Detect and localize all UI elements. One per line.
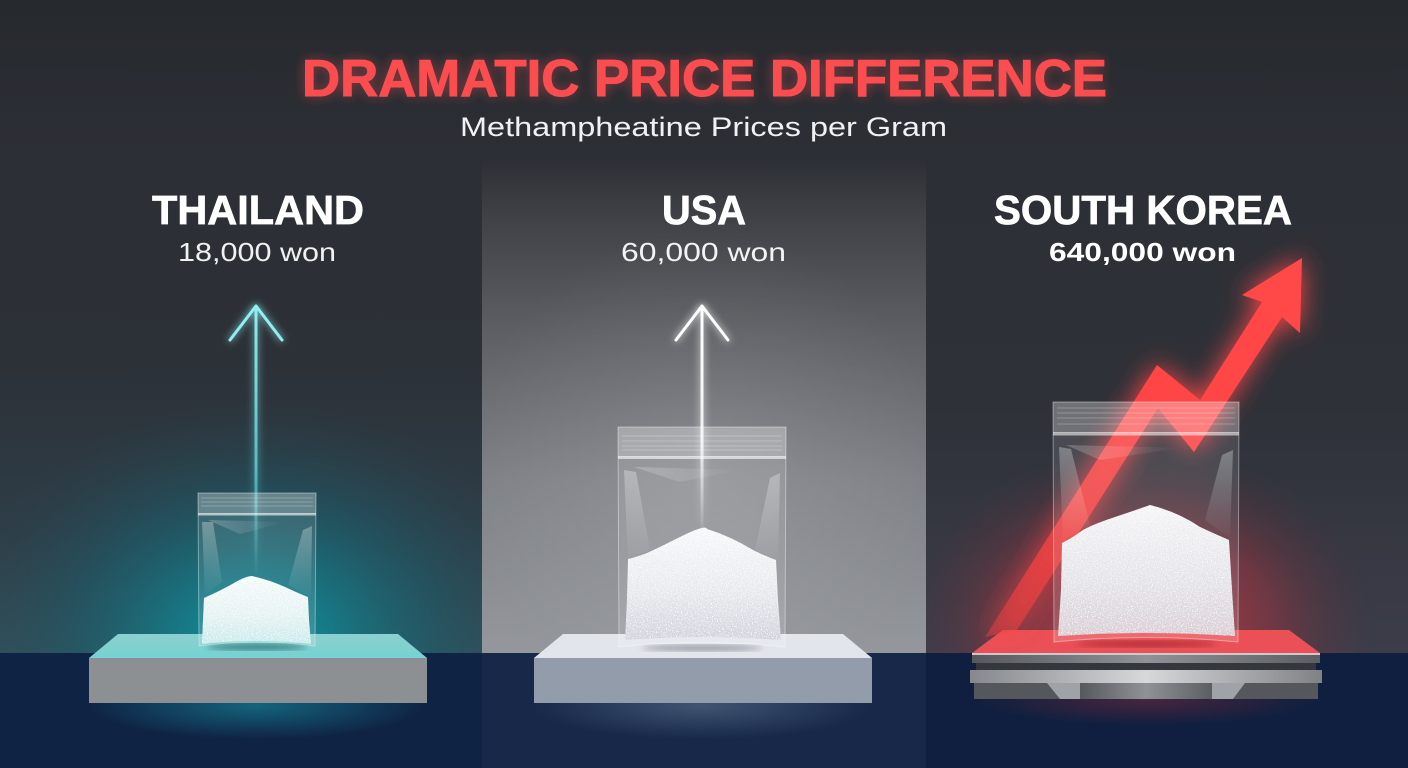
- heading: USA: USA: [662, 187, 746, 233]
- heading: South Korea: SOUTH KOREA: [994, 187, 1292, 233]
- bag: USA: [618, 427, 786, 651]
- icon: teal thin arrow: [230, 306, 282, 578]
- price: South Korea: 640,000 won: [1049, 237, 1236, 267]
- icon: red zigzag arrow: [985, 258, 1302, 637]
- price: Thailand: 18,000 won: [178, 237, 336, 267]
- powder: Thailand: [202, 576, 311, 644]
- platform: Thailand: [89, 634, 427, 703]
- bag: Thailand: [198, 493, 316, 650]
- price: USA: 60,000 won: [621, 237, 786, 267]
- subtitle: Methampheatine Prices per Gram: [460, 112, 947, 142]
- powder: USA: [625, 528, 781, 640]
- platform: USA: [534, 634, 872, 703]
- heading: Thailand: THAILAND: [152, 187, 364, 233]
- powder: South Korea: [1058, 505, 1235, 636]
- panel: South Korea: [970, 187, 1322, 699]
- panel: USA: [534, 187, 872, 703]
- platform: South Korea scale: [970, 630, 1322, 699]
- bag: South Korea: [1053, 402, 1239, 647]
- title: DRAMATIC PRICE DIFFERENCE: [302, 50, 1107, 108]
- icon: white thin arrow: [676, 306, 728, 530]
- panel: Thailand: [89, 187, 427, 703]
